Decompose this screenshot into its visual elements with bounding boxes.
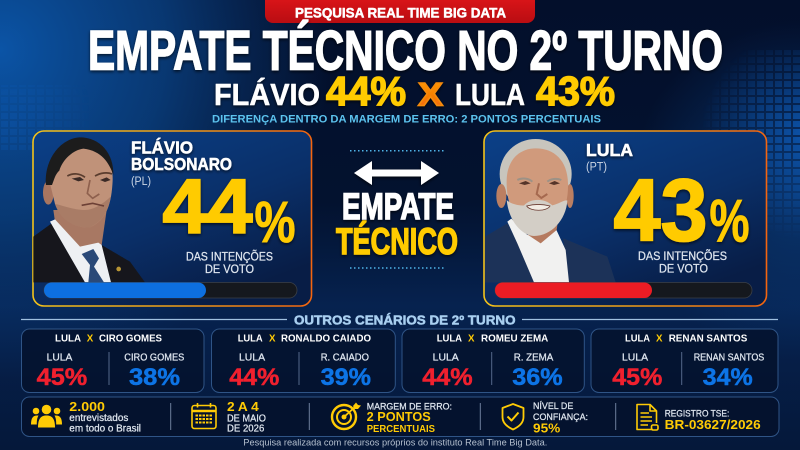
stat: TSE registration: BR-03627/2026: [665, 417, 761, 432]
card: Lula x Ciro Gomes: 38%: [129, 364, 180, 391]
icon: document: [637, 404, 658, 430]
footer note: Pesquisa realizada com recursos próprios do instituto Real Time Big Data.: [243, 438, 547, 449]
stat: margin of error: PERCENTUAIS: [367, 424, 435, 435]
panel: Lula: [484, 131, 766, 306]
card: Lula x Ciro Gomes: CIRO GOMES: [99, 333, 162, 345]
card: Lula x Renan Santos: RENAN SANTOS: [669, 333, 747, 345]
vote share: %: [710, 188, 750, 254]
card: Lula x Ronaldo Caiado: X: [269, 333, 276, 345]
label: empate: EMPATE: [342, 185, 454, 227]
card: Lula x Ciro Gomes: 45%: [37, 364, 88, 391]
stat: sample: [69, 399, 141, 434]
card: Lula x Romeu Zema: LULA: [437, 333, 462, 345]
card: Lula x Ronaldo Caiado: RONALDO CAIADO: [281, 333, 371, 345]
stat: dates: DE 2026: [227, 424, 265, 434]
center: empate técnico: [336, 151, 458, 268]
vote share: %: [254, 190, 296, 255]
headline result: LULA: [455, 77, 525, 112]
label: técnico: TÉCNICO: [336, 220, 458, 262]
candidate name: LULA: [586, 140, 633, 160]
headline result: 44%: [326, 68, 406, 114]
card: Lula x Renan Santos: LULA: [622, 353, 648, 364]
party: (PT): [586, 162, 607, 174]
stat: dates: [227, 399, 266, 434]
headline result: [214, 68, 615, 114]
candidate name: FLÁVIO: [131, 136, 193, 158]
card: Lula x Romeu Zema: LULA: [433, 353, 459, 364]
card: Lula x Romeu Zema: [402, 329, 584, 392]
stat: sample: 2.000: [69, 399, 105, 414]
caption: DAS INTENÇÕES: [186, 251, 273, 264]
portrait: Lula: [485, 139, 616, 282]
headline result: FLÁVIO: [214, 77, 320, 112]
card: Lula x Ronaldo Caiado: 39%: [321, 364, 371, 391]
methodology strip: [22, 397, 779, 436]
stat: confidence level: 95%: [533, 421, 560, 435]
stat: margin of error: MARGEM DE ERRO:: [367, 401, 452, 412]
stat: TSE registration: REGISTRO TSE:: [665, 409, 729, 420]
party: (PL): [131, 176, 151, 188]
card: Lula x Ciro Gomes: CIRO GOMES: [124, 353, 185, 364]
caption: DE VOTO: [205, 264, 254, 276]
stat: sample: em todo o Brasil: [69, 423, 141, 434]
vote share: 44: [162, 164, 253, 250]
caption: [186, 251, 273, 276]
card: Lula x Renan Santos: RENAN SANTOS: [694, 353, 765, 364]
card: Lula x Romeu Zema: ROMEU ZEMA: [481, 333, 549, 345]
headline result: 43%: [536, 68, 615, 114]
section heading: OUTROS CENÁRIOS DE 2º TURNO: [294, 312, 516, 328]
card: Lula x Renan Santos: [591, 329, 778, 392]
icon: target: [332, 402, 361, 429]
stat: dates: 2 A 4: [227, 399, 260, 414]
card: Lula x Ciro Gomes: LULA: [47, 353, 73, 364]
card: Lula x Renan Santos: 45%: [612, 364, 663, 391]
progress bar: [44, 282, 297, 298]
card: Lula x Ronaldo Caiado: LULA: [239, 353, 265, 364]
card: Lula x Ronaldo Caiado: [212, 329, 395, 392]
progress bar: [495, 282, 752, 298]
top banner: PESQUISA REAL TIME BIG DATA: [295, 4, 506, 20]
icon: calendar: [192, 403, 216, 428]
stat: confidence level: [533, 401, 588, 435]
card: Lula x Renan Santos: LULA: [625, 333, 650, 345]
card: Lula x Renan Santos: X: [656, 333, 662, 345]
stat: margin of error: [367, 401, 452, 435]
icon: people: [31, 405, 62, 428]
card: Lula x Ciro Gomes: X: [87, 333, 93, 345]
caption: DE VOTO: [659, 264, 708, 276]
card: Lula x Romeu Zema: R. ZEMA: [514, 353, 554, 364]
vote share: 43: [614, 160, 708, 260]
card: Lula x Romeu Zema: X: [468, 333, 474, 345]
panel: Flávio Bolsonaro: [33, 131, 312, 306]
icon: double arrow: [354, 161, 439, 185]
stat: confidence level: CONFIANÇA:: [533, 412, 588, 423]
card: Lula x Ronaldo Caiado: 44%: [229, 364, 280, 391]
stat: TSE registration: [665, 409, 761, 432]
headline result: X: [418, 76, 444, 112]
portrait: Flávio: [33, 137, 145, 282]
card: Lula x Romeu Zema: 44%: [422, 364, 473, 391]
stat: sample: entrevistados: [69, 413, 128, 424]
caption: [638, 250, 727, 276]
caption: DAS INTENÇÕES: [638, 250, 727, 263]
card: Lula x Ronaldo Caiado: LULA: [238, 333, 263, 345]
card: Lula x Ronaldo Caiado: R. CAIADO: [321, 353, 369, 364]
card: Lula x Ciro Gomes: LULA: [55, 333, 81, 345]
panel: Flávio Bolsonaro: BOLSONARO: [131, 154, 232, 174]
stat: dates: DE MAIO: [227, 414, 266, 424]
stat: margin of error: 2 PONTOS: [367, 410, 431, 424]
card: Lula x Renan Santos: 34%: [703, 364, 753, 391]
icon: shield: [502, 404, 524, 430]
stat: confidence level: NÍVEL DE: [533, 401, 573, 412]
vote share: [162, 164, 296, 255]
card: Lula x Ciro Gomes: [22, 329, 204, 392]
top banner: [265, 0, 535, 23]
subtitle: DIFERENÇA DENTRO DA MARGEM DE ERRO: 2 PONTOS PERCENTUAIS: [212, 114, 601, 126]
card: Lula x Romeu Zema: 36%: [512, 364, 563, 391]
